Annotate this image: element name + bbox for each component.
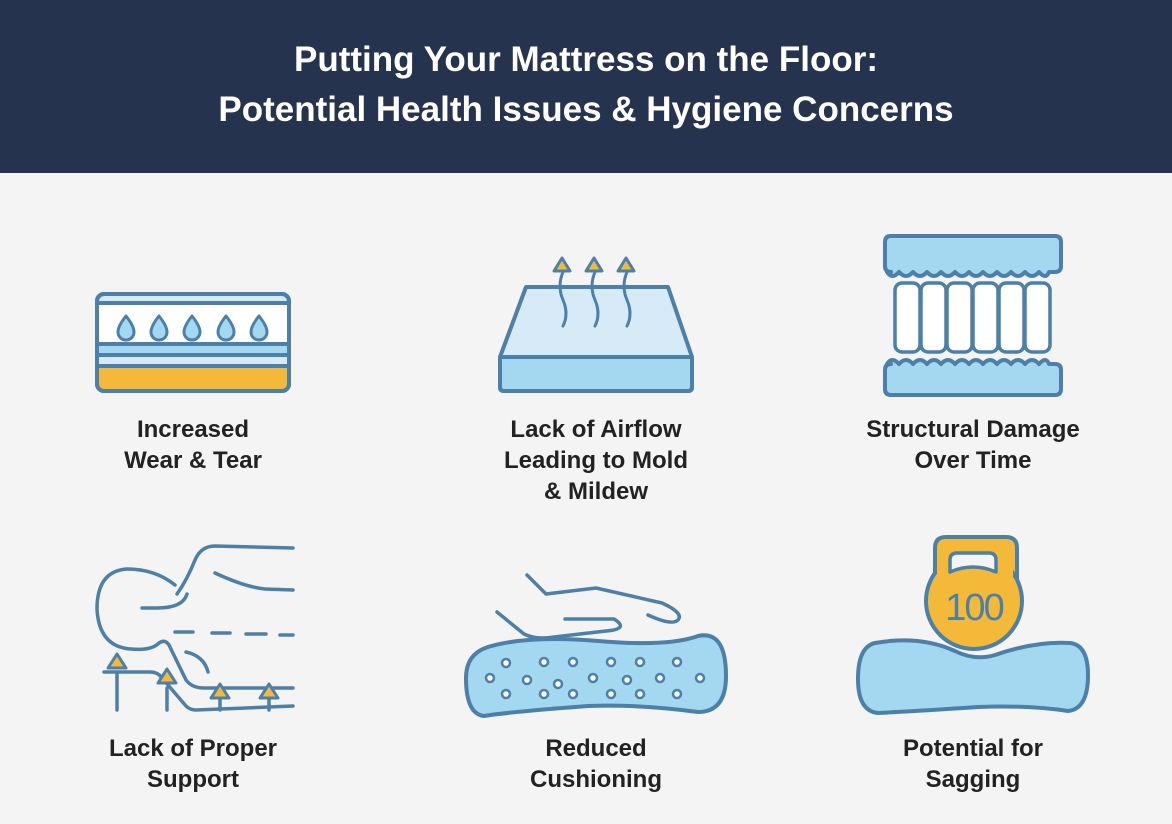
title: Potential Health Issues & Hygiene Concerns [218,90,954,129]
label: reduced cushioning: Cushioning [530,766,662,793]
label: potential for sagging: Sagging [926,766,1020,793]
icon: hand on foam pillow [466,575,726,716]
label: lack of proper support: Lack of Proper [109,735,277,762]
label: lack of airflow: Leading to Mold [504,447,688,474]
label: structural damage [866,416,1080,474]
label: lack of airflow: Lack of Airflow [510,416,682,443]
label: potential for sagging [903,735,1043,793]
icon: compressed springs [885,236,1061,395]
label: reduced cushioning: Reduced [545,735,647,762]
label: structural damage: Structural Damage [866,416,1080,443]
icon: kettlebell sagging mattress: 100 [945,587,1004,629]
label: increased wear & tear [124,416,262,474]
label: lack of proper support: Support [147,766,239,793]
icon: mattress with airflow arrows [500,258,692,391]
label: lack of airflow [504,416,688,505]
label: lack of airflow: & Mildew [544,478,648,505]
label: lack of proper support [109,735,277,793]
label: increased wear & tear: Wear & Tear [124,447,262,474]
icon: mattress layers with drops [97,294,289,391]
icon: person lying without support [97,546,293,710]
label: reduced cushioning [530,735,662,793]
label: potential for sagging: Potential for [903,735,1043,762]
icon: kettlebell sagging mattress [858,537,1088,713]
title [0,0,1172,173]
label: structural damage: Over Time [915,447,1031,474]
label: increased wear & tear: Increased [137,416,249,443]
title: Putting Your Mattress on the Floor: [294,40,878,79]
